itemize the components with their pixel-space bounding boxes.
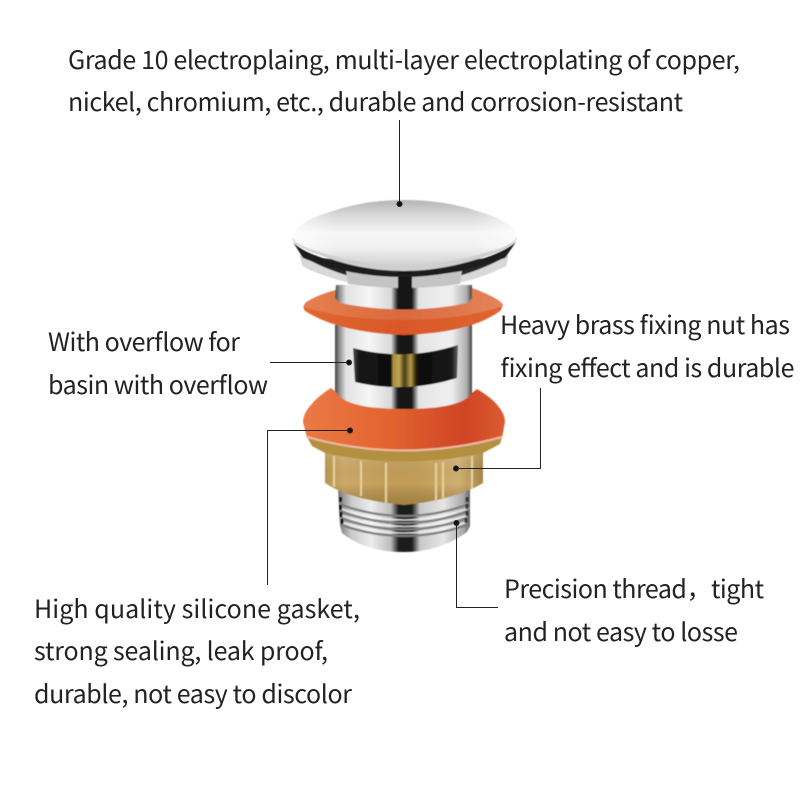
text: fixing nut: Heavy brass fixing nut has [500, 306, 790, 342]
text: fixing nut [500, 306, 794, 385]
chrome collar [335, 285, 472, 310]
text: thread: Precision thread，tight [504, 570, 765, 606]
text: gasket: High quality silicone gasket, [34, 590, 360, 626]
text: thread [504, 570, 765, 649]
thread section [338, 490, 470, 552]
text: overflow: With overflow for [48, 323, 240, 359]
callout line: fixing nut [454, 388, 540, 471]
text: gasket: durable, not easy to discolor [34, 675, 352, 711]
callout line: overflow [270, 360, 352, 365]
text: thread: and not easy to losse [504, 613, 738, 649]
brass nut [307, 437, 502, 505]
text: overflow: basin with overflow [48, 366, 268, 402]
callout line: thread [454, 520, 498, 608]
lower chrome body [335, 325, 472, 415]
product: pop-up drain [292, 200, 517, 552]
text: electroplating [68, 41, 740, 119]
text: fixing nut: fixing effect and is durable [500, 349, 794, 385]
text: overflow [48, 323, 268, 402]
under-cap ring [300, 256, 508, 290]
text: electroplating: nickel, chromium, etc., durable and corrosion-resistant [68, 83, 684, 119]
text: gasket [34, 590, 360, 711]
overflow window [353, 345, 458, 387]
text: electroplating: Grade 10 electroplaing, multi-layer electroplating of copper, [68, 41, 740, 77]
text: gasket: strong sealing, leak proof, [34, 632, 328, 668]
upper silicone flange [304, 288, 503, 335]
callout line: gasket [268, 428, 352, 585]
callout line: top electroplating [397, 120, 402, 206]
chrome cap [292, 200, 517, 277]
lower silicone gasket [303, 388, 505, 451]
